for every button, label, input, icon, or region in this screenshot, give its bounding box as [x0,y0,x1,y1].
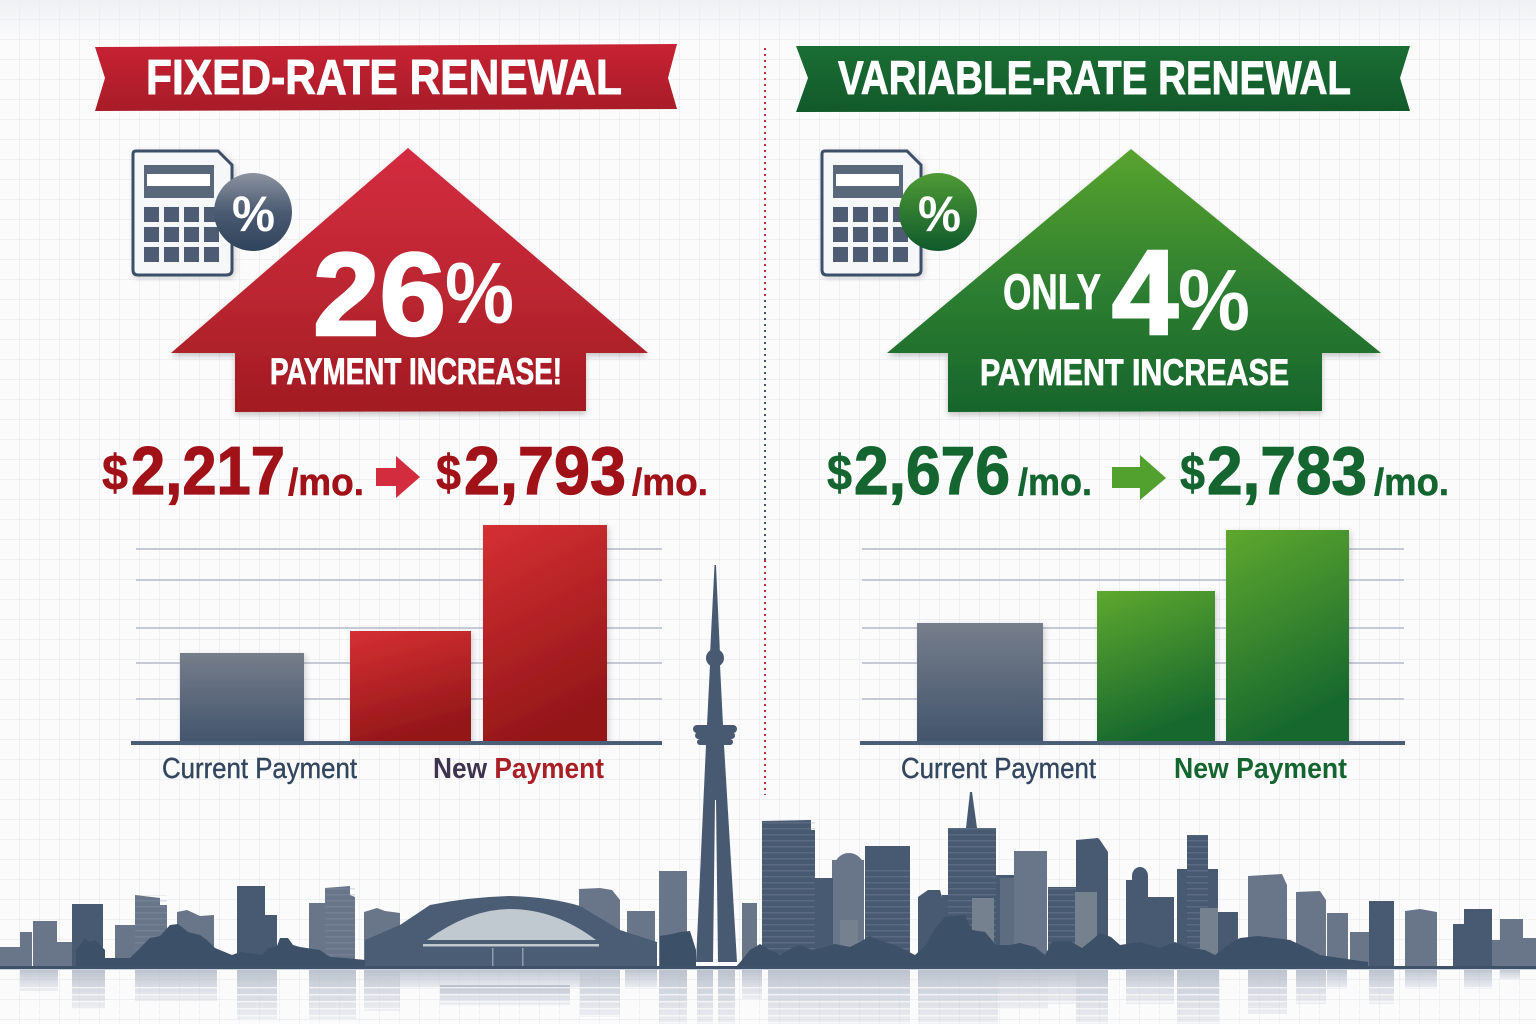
CN Tower [693,565,737,962]
price change: $2,217 to $2,793: 2,217 [131,433,285,509]
stadium dome [365,896,657,968]
price change: $2,217 to $2,793: /mo. [288,462,364,504]
arrow: 26% payment increase: 26 [313,229,446,361]
bar chart: variable-rate payments [860,530,1405,745]
arrow: only 4% payment increase [887,149,1381,412]
price change: $2,676 to $2,783 [827,433,1449,509]
arrow: only 4% payment increase: PAYMENT INCREASE [980,352,1289,393]
arrow: 26% payment increase: % [445,246,514,342]
icon: calculator with green percent badge: % [918,186,961,242]
skyline: window banding and light facades [135,820,1218,968]
center dotted divider [764,48,766,795]
banner: fixed-rate renewal: FIXED-RATE RENEWAL [146,51,622,105]
skyline: dark foreground towers [72,792,1492,968]
skyline: tree line and ground [76,915,1368,968]
arrow: 26% payment increase [171,148,648,412]
arrow: only 4% payment increase: % [1178,253,1250,349]
price change: $2,676 to $2,783: $ [1180,445,1205,501]
icon: calculator with green percent badge [822,151,977,275]
skyline reflection [0,969,1536,1024]
banner: variable-rate renewal: VARIABLE-RATE RENEWAL [838,51,1351,104]
label: new payment: New Payment [1174,753,1347,785]
price change: $2,676 to $2,783: 2,783 [1207,433,1367,509]
ground line [0,966,1536,969]
panel: variable-rate renewal [796,46,1449,785]
banner: variable-rate renewal [796,46,1410,112]
price change: $2,676 to $2,783: 2,676 [854,433,1010,509]
arrow: 26% payment increase: PAYMENT INCREASE! [270,351,562,392]
label: new payment: New Payment [433,753,604,785]
price change: $2,217 to $2,793: $ [436,445,461,501]
price change: $2,217 to $2,793: /mo. [632,462,708,504]
price change: $2,676 to $2,783: $ [827,445,852,501]
icon: calculator with percent badge [133,151,292,275]
price change: $2,217 to $2,793: $ [102,445,128,501]
skyline: light background towers [0,851,1536,968]
icon: calculator with percent badge: % [232,186,275,242]
price change: $2,217 to $2,793: 2,793 [464,433,626,509]
price change: $2,217 to $2,793 [102,433,708,509]
panel: fixed-rate renewal [95,44,708,785]
price change: $2,676 to $2,783: /mo. [1018,462,1092,504]
price change: $2,676 to $2,783: /mo. [1374,462,1449,504]
arrow: only 4% payment increase: 4 [1112,226,1178,360]
bar chart: fixed-rate payments [131,525,662,745]
label: current payment: Current Payment [162,753,357,785]
arrow: only 4% payment increase: ONLY [1003,264,1101,320]
label: current payment: Current Payment [901,753,1096,785]
